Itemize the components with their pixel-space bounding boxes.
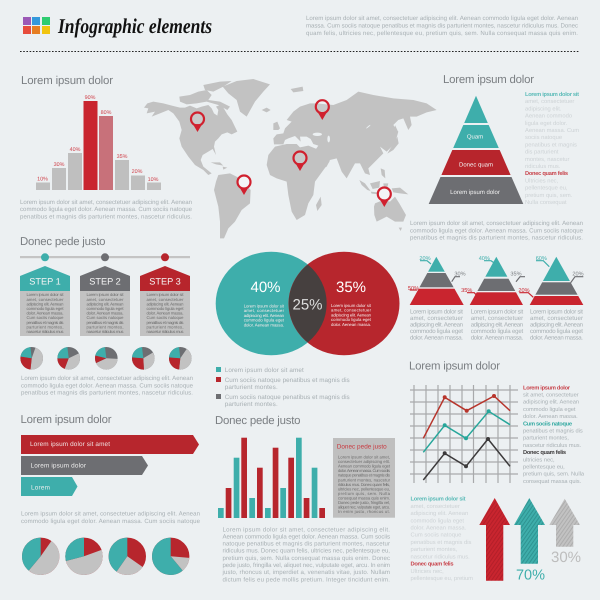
side text: Donec quam felis xyxy=(525,170,568,177)
captions: Lorem ipsum dolor sit xyxy=(471,309,523,316)
side text: Ultricies nec, xyxy=(410,568,444,575)
side text: Aenean massa. Cum xyxy=(525,127,579,134)
legend: Lorem ipsum dolor sit amet xyxy=(225,367,304,374)
side text: dis parturient xyxy=(525,149,559,156)
step 2: Cum sociis natoque xyxy=(86,315,124,320)
side text: pellentesque eu, xyxy=(523,464,565,470)
mini pyramid 2: 40% xyxy=(479,256,490,262)
side text: pretium quis, sem. Nulla xyxy=(523,471,585,478)
bar values xyxy=(37,95,159,183)
step 2: adipiscing elit. Aenean xyxy=(86,301,124,306)
side text: pretium quis, sem. xyxy=(525,192,573,199)
step 2: Lorem ipsum dolor sit xyxy=(86,292,124,297)
captions: Lorem ipsum dolor sit xyxy=(410,309,463,316)
captions: Lorem ipsum dolor sit xyxy=(530,309,583,316)
timeline xyxy=(20,253,190,261)
bar values: 10% xyxy=(148,177,159,183)
step 1 xyxy=(20,266,70,336)
ribbon: grey xyxy=(21,456,148,475)
callout box: pretium quis, sem. Nulla xyxy=(338,491,391,496)
step 1: commodo ligula eget xyxy=(26,306,64,311)
side text: parturient montes, xyxy=(410,546,458,553)
side text: commodo ligula eget xyxy=(523,406,576,413)
captions: commodo ligula eget xyxy=(530,328,583,335)
mini pyramid 2: 35% xyxy=(461,288,472,294)
paragraph: Lorem ipsum dolor sit amet, consectetuer adipiscing elit. xyxy=(222,526,390,533)
callout box: ridiculus mus. Donec quam felis, xyxy=(338,482,390,487)
callout box: Donec pede justo xyxy=(337,444,387,451)
paragraph: commodo ligula eget dolor. Aenean massa. Cum sociis natoque xyxy=(21,382,194,389)
paragraph: Lorem ipsum dolor sit amet, consectetuer adipiscing elit. Aenean xyxy=(21,375,193,382)
pyramid chart: Lorem ipsum dolor xyxy=(450,189,500,196)
paragraph: ridiculus mus. Donec quam felis, ultricies nec, pellentesque eu, xyxy=(222,548,390,555)
side text: Nulla consequat xyxy=(525,199,567,206)
side text: Cum sociis natoque xyxy=(410,532,461,539)
map pin: Russia xyxy=(316,100,329,120)
venn diagram: 25% xyxy=(292,296,323,314)
side text: consequat massa quis. xyxy=(523,478,582,485)
captions xyxy=(410,309,583,342)
side text: pellentesque eu, pretium xyxy=(410,575,473,582)
paragraph: Lorem ipsum dolor sit amet, consectetuer adipiscing elit. Aenean xyxy=(21,511,200,518)
step 2: nascetur ridiculus mus xyxy=(86,329,124,334)
captions: amet, consectetuer xyxy=(471,315,523,322)
side text: Lorem ipsum dolor xyxy=(523,384,571,391)
paragraph xyxy=(20,199,193,220)
bar values: 35% xyxy=(117,154,128,160)
captions: dolor. Aenean massa. xyxy=(471,335,523,342)
map pin: Australia xyxy=(378,188,391,207)
callout box xyxy=(333,438,395,518)
heading: Donec pede justo xyxy=(20,236,106,248)
heading: Donec pede justo xyxy=(215,415,300,427)
mini pyramid 3 xyxy=(518,256,590,305)
side text: adipiscing elit. Aenean xyxy=(410,510,468,517)
side text: sit amet, consectetuer xyxy=(523,392,579,398)
step 1: nascetur ridiculus mus xyxy=(26,329,64,334)
callout box: parturient montes, nascetur xyxy=(338,477,391,482)
bar values: 20% xyxy=(132,169,143,175)
world map xyxy=(144,79,437,238)
arrow: grey xyxy=(549,499,580,547)
side text: ridiculus mus. xyxy=(525,163,561,170)
paragraph: justo, rhoncus ut, imperdiet a, venenatis vitae, justo. Nullam xyxy=(222,569,390,576)
step 3: penatibus et magnis dis xyxy=(146,320,184,325)
captions: commodo ligula eget xyxy=(410,328,463,335)
mini pyramid 1: 50% xyxy=(408,286,419,292)
side text: adipiscing elit. xyxy=(525,105,562,112)
paragraph: penatibus et magnis dis parturient montes, nascetur ridiculus. xyxy=(21,390,193,397)
columns xyxy=(218,438,325,518)
step 2: amet, consectetuer xyxy=(86,297,124,302)
pyramid chart xyxy=(429,96,523,204)
captions: adipiscing elit. Aenean xyxy=(410,322,463,328)
paragraph xyxy=(21,511,201,525)
side text: ultricies nec, xyxy=(523,456,555,463)
paragraph xyxy=(410,220,584,242)
step 2: dolor. Aenean massa. xyxy=(86,311,124,316)
panel: line chart xyxy=(409,360,585,485)
venn diagram: 35% xyxy=(336,279,366,296)
paragraph xyxy=(21,375,194,397)
arrow: teal xyxy=(514,498,545,564)
step 1: adipiscing elit. Aenean xyxy=(26,301,64,306)
venn diagram: commodo ligula eget xyxy=(244,318,285,323)
pyramid chart: Donec quam xyxy=(459,162,493,168)
panel: pyramid xyxy=(410,74,584,242)
step 3: commodo ligula eget xyxy=(146,306,184,311)
side text: nascetur ridiculus mus. xyxy=(410,553,470,560)
side text: montes, nascetur xyxy=(525,157,570,163)
step 3: amet, consectetuer xyxy=(146,297,184,302)
venn diagram: Lorem ipsum dolor sit xyxy=(244,304,285,308)
captions: adipiscing elit. Aenean xyxy=(530,322,583,328)
side text: penatibus et magnis dis xyxy=(410,539,472,546)
callout box: natoque penatibus et magnis dis xyxy=(338,473,390,478)
paragraph: commodo ligula eget dolor. Aenean massa. Cum sociis natoque xyxy=(410,227,584,234)
panel: bar chart xyxy=(20,75,193,220)
intro text block: massa. Cum sociis natoque penatibus et magnis dis parturient montes, nascetur ridiculus mus. Donec xyxy=(306,22,578,30)
title: Infographic elements xyxy=(57,14,212,38)
bar values: 90% xyxy=(85,95,96,101)
step 1: parturient montes, xyxy=(26,324,64,329)
ribbon: teal: Lorem xyxy=(31,484,50,492)
side text: adipiscing elit. Aenean xyxy=(523,399,579,406)
side text: amet, consectetuer xyxy=(410,504,460,510)
chart xyxy=(410,385,518,483)
side text: nascetur ridiculus mus. xyxy=(523,442,582,449)
side text: sociis natoque xyxy=(525,134,562,141)
step 1: STEP 1 xyxy=(29,276,61,286)
heading: Lorem ipsum dolor xyxy=(443,74,534,86)
captions: amet, consectetuer xyxy=(410,315,463,322)
side text: dolor. Aenean massa. xyxy=(523,413,578,420)
side text: pellentesque eu, xyxy=(525,185,568,192)
paragraph: commodo ligula eget dolor. Aenean massa. Cum sociis natoque xyxy=(21,518,201,525)
logo: colour squares xyxy=(23,17,50,34)
arrow: red xyxy=(479,498,510,581)
mini pyramid 1: 20% xyxy=(419,256,431,262)
mini pyramid 2: 35% xyxy=(510,272,522,278)
panel: column chart xyxy=(215,415,395,583)
heading: Lorem ipsum dolor xyxy=(21,75,113,87)
heading: Lorem ipsum dolor xyxy=(20,414,112,426)
mini pyramid 3: 20% xyxy=(572,272,584,278)
venn diagram: dolor. Aenean massa. xyxy=(244,322,284,327)
step 1: Lorem ipsum dolor sit xyxy=(26,292,64,297)
step 3: parturient montes, xyxy=(146,324,184,329)
panel: arrows xyxy=(410,496,581,583)
step 2: commodo ligula eget xyxy=(86,306,124,311)
side text: parturient montes, xyxy=(523,435,569,442)
side text: penatibus et magnis dis xyxy=(523,428,583,434)
side text: amet, consectetuer xyxy=(525,99,574,105)
value 70%: 70% xyxy=(516,567,545,583)
captions: dolor. Aenean massa. xyxy=(410,335,463,342)
step 3: STEP 3 xyxy=(149,276,181,286)
callout box: consequat massa quis enim. xyxy=(338,496,390,500)
side text: dolor. Aenean massa. xyxy=(410,524,467,532)
bars xyxy=(36,101,161,190)
side text: Ultricies nec, xyxy=(525,177,559,184)
callout box: Lorem ipsum dolor sit amet, xyxy=(338,454,390,460)
mini pyramid 3: 20% xyxy=(518,288,530,294)
venn diagram: Lorem ipsum dolor sit xyxy=(331,303,372,308)
step 3: dolor. Aenean massa. xyxy=(146,311,184,316)
mini pyramid 3: 60% xyxy=(536,256,547,262)
paragraph: Aenean commodo ligula eget dolor. Aenean massa. Cum sociis xyxy=(222,534,390,540)
step 3: nascetur ridiculus mus xyxy=(146,329,184,334)
side text: Donec quam felis xyxy=(523,449,566,456)
callout box: Donec pede justo, fringilla vel, xyxy=(338,500,390,505)
side text xyxy=(525,91,579,206)
paragraph: pretium quis, sem. Nulla consequat massa quis enim. Donec xyxy=(222,555,390,562)
panel: steps xyxy=(20,236,194,397)
paragraph: Lorem ipsum dolor sit amet, consectetuer adipiscing elit. Aenean xyxy=(410,220,583,227)
value 30%: 30% xyxy=(551,549,581,566)
venn diagram: commodo ligula eget xyxy=(331,317,372,322)
pyramid chart: Quam xyxy=(467,134,483,140)
bar values: 30% xyxy=(54,162,65,168)
mini pyramid 1: 30% xyxy=(454,272,466,278)
paragraph: dictum felis eu pede mollis pretium. Integer tincidunt enim. xyxy=(222,576,390,583)
step 2: parturient montes, xyxy=(86,324,124,329)
side text xyxy=(523,384,585,485)
step 2: STEP 2 xyxy=(89,276,121,286)
ribbon: red xyxy=(21,435,199,454)
callout box: ultricies nec, pellentesque eu, xyxy=(338,486,390,491)
captions: dolor. Aenean massa. xyxy=(530,335,583,342)
paragraph: penatibus et magnis dis parturient montes, nascetur ridiculus. xyxy=(410,235,583,242)
side text xyxy=(410,496,473,582)
step 2: penatibus et magnis dis xyxy=(86,320,124,325)
side text: Aenean commodo xyxy=(525,113,572,120)
legend: parturient montes. xyxy=(225,401,278,408)
side text: Lorem ipsum dolor sit xyxy=(525,91,579,98)
step 1: dolor. Aenean massa. xyxy=(26,311,64,316)
venn diagram: 40% xyxy=(250,279,281,296)
heading: Lorem ipsum dolor xyxy=(409,360,500,372)
callout box: Aenean commodo ligula eget xyxy=(338,464,391,469)
step 3: Lorem ipsum dolor sit xyxy=(146,292,184,297)
side text: Donec quam felis xyxy=(410,561,454,568)
venn diagram: adipiscing elit. Aenean xyxy=(331,312,372,317)
map pin: North America xyxy=(191,112,204,132)
callout box: consectetuer adipiscing elit. xyxy=(338,459,390,464)
paragraph: pede justo, fringilla vel, aliquet nec, vulputate eget, arcu. In enim xyxy=(222,562,390,569)
callout box: dolor. Aenean massa. Cum sociis xyxy=(338,468,390,473)
side text: Lorem ipsum dolor sit xyxy=(410,496,466,503)
ribbon: grey: Lorem ipsum dolor xyxy=(30,462,87,469)
paragraph: natoque penatibus et magnis dis parturient montes, nascetur xyxy=(222,541,390,548)
side text: commodo ligula eget xyxy=(410,517,464,524)
callout box: aliquet nec, vulputate eget, arcu. xyxy=(338,505,390,510)
legend: Cum sociis natoque penatibus et magnis dis xyxy=(225,394,350,401)
step 3 xyxy=(140,266,190,336)
bar values: 10% xyxy=(37,176,48,182)
step 2 xyxy=(80,266,130,336)
legend: Cum sociis natoque penatibus et magnis dis xyxy=(225,377,350,384)
side text: penatibus et magnis xyxy=(525,141,577,148)
mini pyramid 2 xyxy=(461,256,530,305)
paragraph: Lorem ipsum dolor sit amet, consectetuer adipiscing elit. Aenean xyxy=(20,199,192,206)
ribbon: red: Lorem ipsum dolor sit amet xyxy=(30,441,110,448)
panel: mini pyramids xyxy=(405,256,590,342)
ribbon: teal xyxy=(21,477,78,496)
side text: ligula eget dolor. xyxy=(525,120,568,127)
legend xyxy=(216,367,350,408)
panel: ribbons and pies xyxy=(20,414,201,566)
paragraph: commodo ligula eget dolor. Aenean massa. Cum sociis natoque xyxy=(20,206,193,213)
step 3: Cum sociis natoque xyxy=(146,315,184,320)
map pin: South America xyxy=(238,176,250,195)
captions: adipiscing elit. Aenean xyxy=(471,322,523,328)
large pie charts xyxy=(31,547,180,566)
step 3: adipiscing elit. Aenean xyxy=(146,301,184,306)
captions: commodo ligula eget xyxy=(471,328,523,335)
intro text block: Lorem ipsum dolor sit amet, consectetuer adipiscing elit. Aenean commodo ligula eget dolor. Aenean xyxy=(306,15,578,22)
venn diagram: amet, consectetuer xyxy=(331,308,372,313)
venn diagram: adipiscing elit. Aenean xyxy=(244,313,285,318)
mini pyramid 1 xyxy=(408,256,466,305)
intro text block: quam felis, ultricies nec, pellentesque eu, pretium quis, sem. Nulla consequat massa quis enim. xyxy=(306,30,578,37)
paragraph: penatibus et magnis dis parturient montes, nascetur ridiculus. xyxy=(20,214,192,220)
intro text block xyxy=(306,15,578,37)
step 1: penatibus et magnis dis xyxy=(26,320,64,325)
side text: Cum sociis natoque xyxy=(523,420,572,427)
paragraph xyxy=(222,526,390,583)
venn diagram xyxy=(216,252,400,355)
venn diagram: dolor. Aenean massa. xyxy=(331,322,371,327)
small pie charts xyxy=(26,353,186,364)
callout box: In enim justo, rhoncus ut. xyxy=(338,509,390,514)
venn diagram: amet, consectetuer xyxy=(244,308,285,313)
bar values: 80% xyxy=(101,110,112,116)
captions: amet, consectetuer xyxy=(530,315,583,322)
legend: parturient montes. xyxy=(225,384,278,391)
map pin: Africa xyxy=(294,152,306,171)
step 1: Cum sociis natoque xyxy=(26,315,64,320)
step 1: amet, consectetuer xyxy=(26,297,64,302)
bar values: 40% xyxy=(70,147,81,153)
